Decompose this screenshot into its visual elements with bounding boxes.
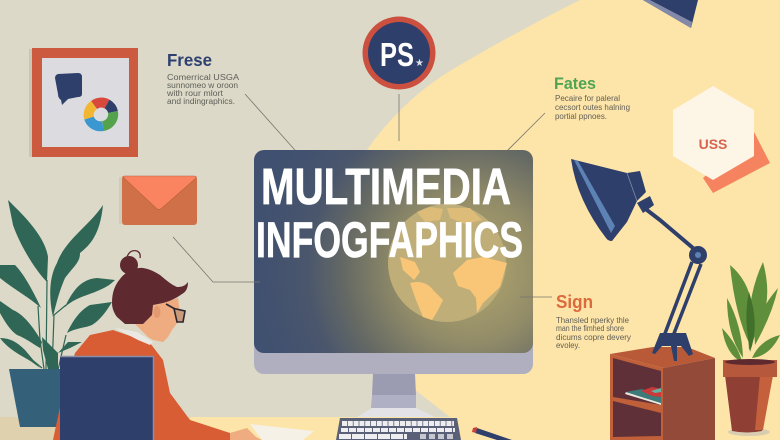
pencil xyxy=(472,427,512,440)
monitor xyxy=(254,150,533,417)
text block: Fates: Fates xyxy=(554,75,596,93)
icon: PS badge: ★ xyxy=(415,58,424,69)
icon: PS badge xyxy=(362,16,436,90)
text block: Frese: Comerrical USGA xyxy=(167,73,240,82)
title xyxy=(256,158,523,268)
text block: Fates: cecsort outes halning xyxy=(555,103,630,112)
plant: right with pot xyxy=(722,262,780,436)
text block: Sign: Sign xyxy=(556,292,593,312)
text block: Frese: and indingraphics. xyxy=(167,97,235,106)
text block: Frese: with rour mlort xyxy=(166,89,224,98)
connector lines xyxy=(173,94,552,297)
text block: Sign: evoley. xyxy=(556,341,580,350)
text block: Frese: Frese xyxy=(167,50,212,70)
chair back xyxy=(60,356,154,440)
plant pot: left xyxy=(9,369,62,427)
text block: Sign: dicums copre devery xyxy=(556,333,631,342)
icon: hanging lamp top xyxy=(643,0,698,28)
text block: Fates xyxy=(554,75,630,121)
text block: Frese: sunnomeo w oroon xyxy=(167,81,238,90)
globe xyxy=(388,204,507,322)
icon: framed picture with chat bubble and donut chart xyxy=(29,48,138,157)
title: INFOGFAPHICS xyxy=(256,212,523,268)
text block: Fates: Pecaire for paleral xyxy=(555,94,620,103)
paper on desk xyxy=(250,424,314,440)
books xyxy=(625,387,661,405)
icon: PS badge: PS xyxy=(380,36,414,73)
icon: USS hexagon xyxy=(673,86,770,193)
text block: Sign: Thansled nperky thle xyxy=(556,316,630,325)
monitor screen xyxy=(254,150,533,353)
text block: Sign xyxy=(556,292,631,350)
desk lamp xyxy=(571,159,707,361)
monitor stand xyxy=(357,374,435,417)
text block: Fates: portial ppnoes. xyxy=(555,112,607,121)
keyboard xyxy=(336,418,461,440)
icon: envelope xyxy=(119,176,197,225)
screen connector ends xyxy=(254,282,533,297)
plant: left xyxy=(0,200,115,370)
icon: USS hexagon: USS xyxy=(699,136,727,152)
text block: Frese xyxy=(166,50,240,106)
title: MULTIMEDIA xyxy=(261,158,511,215)
bookshelf xyxy=(610,347,715,440)
text block: Sign: man the fimhed shore xyxy=(556,324,624,333)
person at desk xyxy=(53,251,262,440)
